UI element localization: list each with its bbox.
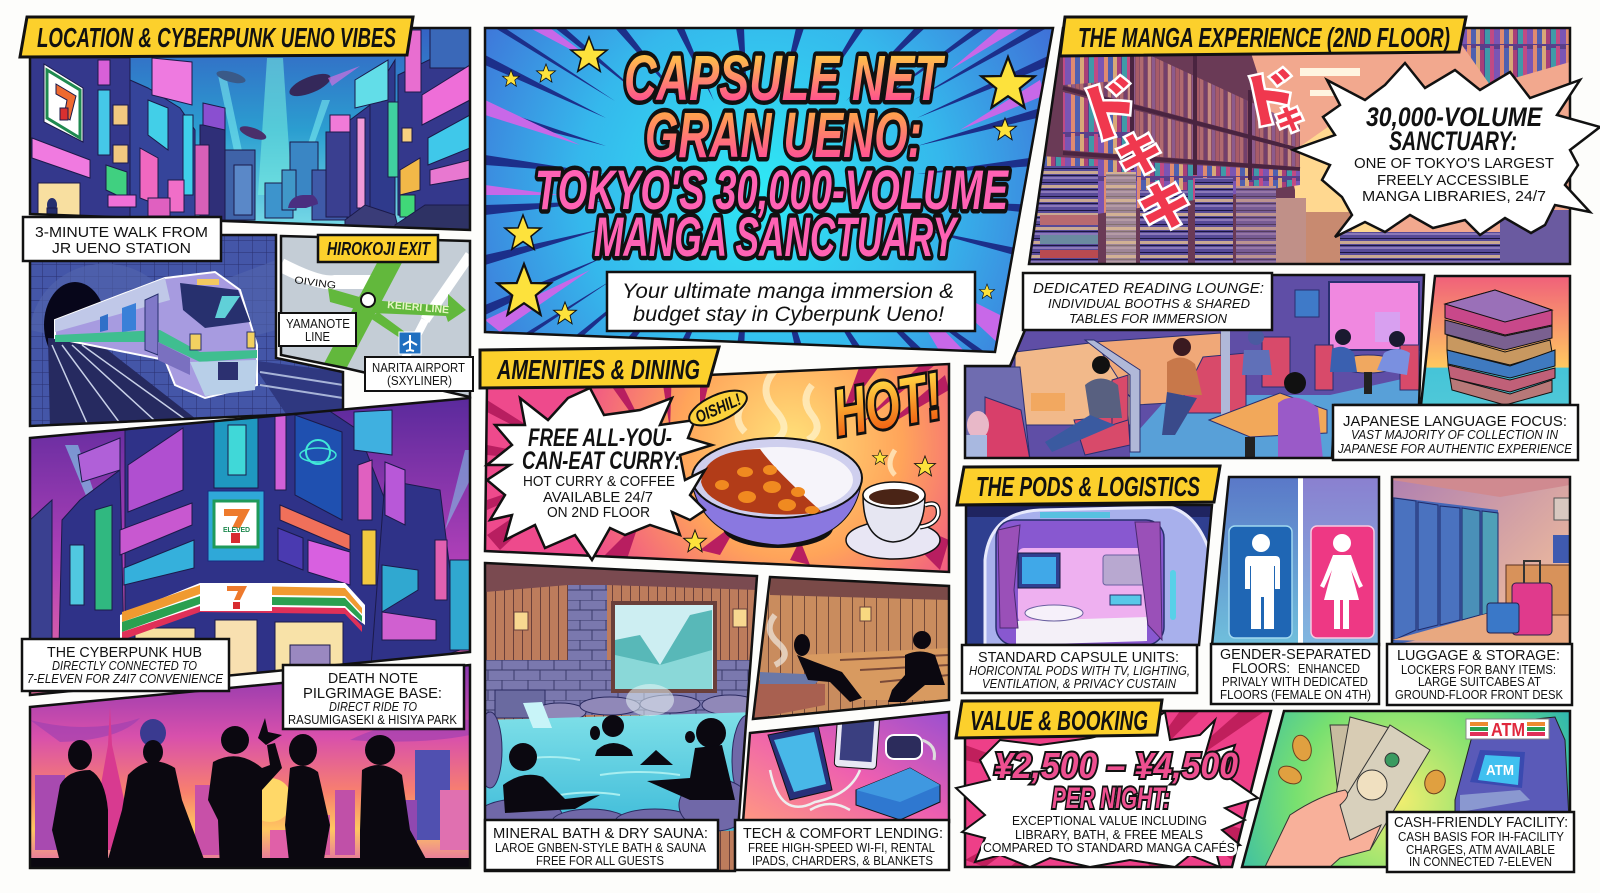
section: amenities and dining (478, 347, 950, 873)
panel: neon street (30, 28, 470, 235)
sign: Hirokoji exit: HIROKOJI EXIT (327, 239, 432, 259)
coffee cup (846, 482, 940, 559)
heading: location: LOCATION & CYBERPUNK UENO VIBES (37, 22, 396, 53)
title text (535, 42, 1009, 268)
burst: price callout: EXCEPTIONAL VALUE INCLUDING (1012, 814, 1207, 828)
silhouette group (30, 718, 470, 870)
sound effects: doki doki: ド (1235, 62, 1305, 138)
panel: price (965, 711, 1275, 871)
book stacks (1030, 166, 1098, 266)
icon: book stack (1445, 290, 1555, 405)
burst: price callout (956, 712, 1258, 867)
icon: iPad (834, 720, 880, 770)
caption: Death Note pilgrimage: PILGRIMAGE BASE: (303, 685, 442, 702)
caption: cyberpunk hub (22, 639, 229, 691)
caption: cash-friendly facility: CASH BASIS FOR IH-FACILITY (1398, 830, 1565, 844)
panel: tech lending (743, 711, 950, 824)
panel: capsule pod (966, 505, 1212, 647)
subtitle callout: budget stay in Cyberpunk Ueno! (633, 303, 944, 326)
burst: free curry callout: AVAILABLE 24/7 (543, 489, 653, 506)
caption: Japanese language focus: JAPANESE LANGUAGE FOCUS: (1343, 413, 1567, 430)
icon: blanket (856, 768, 940, 820)
panel: cash and ATM (1240, 711, 1572, 869)
caption: Yamanote line: YAMANOTE (286, 317, 350, 331)
section: location and cyberpunk Ueno vibes (20, 17, 473, 870)
stars (497, 37, 1035, 324)
burst: price callout: ¥2,500 – ¥4,500 (994, 745, 1238, 786)
caption: luggage and storage: LUGGAGE & STORAGE: (1397, 647, 1560, 664)
burst: free curry callout: FREE ALL-YOU- (528, 424, 672, 452)
steam (738, 370, 817, 440)
burst: price callout: COMPARED TO STANDARD MANGA CAFÉS (983, 840, 1235, 855)
burst: 30,000-volume sanctuary: FREELY ACCESSIBLE (1377, 172, 1529, 189)
icon: coins (1276, 733, 1449, 797)
bathers (503, 715, 735, 813)
caption: Death Note pilgrimage (283, 665, 464, 729)
icon: female sign (1311, 526, 1374, 638)
title text: CAPSULE NET (624, 42, 945, 114)
sound effects: doki doki: キ (1273, 102, 1307, 138)
burst: free curry callout: CAN-EAT CURRY: (522, 447, 680, 475)
caption: standard capsule units (962, 645, 1197, 693)
caption: cyberpunk hub: DIRECTLY CONNECTED TO (52, 658, 197, 673)
road label: OIVING (294, 275, 337, 292)
burst: free curry callout: HOT CURRY & COFFEE (523, 473, 675, 490)
caption: cash-friendly facility: CASH-FRIENDLY FACILITY: (1394, 814, 1568, 831)
caption: Japanese language focus: JAPANESE FOR AUTHENTIC EXPERIENCE (1337, 441, 1572, 456)
title text: MANGA SANCTUARY (594, 205, 959, 268)
caption: gender-separated floors (1211, 644, 1379, 704)
caption: gender-separated floors: PRIVALY WITH DEDICATED (1222, 675, 1368, 689)
caption: tech lending: IPADS, CHARDERS, & BLANKETS (752, 854, 933, 868)
panel: 7-Eleven cyberpunk hub (30, 398, 470, 698)
caption: gender-separated floors: GENDER-SEPARATED (1220, 646, 1371, 663)
caption: luggage and storage (1387, 644, 1572, 705)
icon: 7-Eleven sign (208, 491, 264, 561)
panel: manga library (1025, 15, 1572, 268)
caption: tech lending (735, 820, 949, 870)
curry bowl (691, 438, 862, 548)
caption: tech lending: TECH & COMFORT LENDING: (743, 825, 943, 842)
caption: luggage and storage: LOCKERS FOR BANY ITEMS: (1401, 663, 1556, 677)
burst: 30,000-volume sanctuary: SANCTUARY: (1389, 126, 1517, 156)
icon: tablet (768, 725, 832, 800)
sound effects: doki doki: ド (1070, 69, 1150, 154)
icon: hand (1265, 790, 1381, 867)
burst: 30,000-volume sanctuary: 30,000-VOLUME (1366, 102, 1543, 132)
caption: cyberpunk hub: THE CYBERPUNK HUB (47, 644, 202, 661)
storefront stripes (120, 583, 365, 640)
booths (1015, 343, 1135, 425)
sound effects: doki doki: キ (1110, 123, 1170, 187)
caption: Narita airport (365, 357, 473, 391)
caption: gender-separated floors: ENHANCED (1298, 662, 1360, 676)
caption: gender-separated floors: FLOORS: (1232, 660, 1290, 677)
caption: luggage and storage: GROUND-FLOOR FRONT DESK (1395, 688, 1564, 702)
caption: mineral bath (485, 820, 718, 870)
subtitle callout (607, 272, 975, 331)
caption: cash-friendly facility: IN CONNECTED 7-ELEVEN (1409, 855, 1552, 869)
sound effects: doki doki (1083, 65, 1306, 232)
icon: banknotes (1325, 717, 1430, 850)
caption: Death Note pilgrimage: DIRECT RIDE TO (329, 699, 417, 714)
caption: dedicated reading lounge: TABLES FOR IMMERSION (1069, 311, 1228, 326)
panel: gender-separated floors (1212, 477, 1380, 647)
caption: Japanese language focus: VAST MAJORITY OF COLLECTION IN (1351, 427, 1559, 442)
caption: gender-separated floors: FLOORS (FEMALE ON 4TH) (1220, 688, 1371, 702)
caption: tech lending: FREE HIGH-SPEED WI-FI, RENTAL (748, 841, 935, 855)
caption: Japanese language focus (1333, 405, 1578, 460)
heading: amenities: AMENITIES & DINING (496, 354, 700, 385)
caption: dedicated reading lounge: INDIVIDUAL BOOTHS & SHARED (1048, 296, 1250, 311)
neon window (1329, 282, 1419, 350)
icon: charger (770, 770, 860, 810)
panel: free curry (485, 358, 950, 574)
speed lines (485, 28, 1050, 352)
panel: title (485, 28, 1055, 353)
caption: standard capsule units: VENTILATION, & PRIVACY CUSTAIN (982, 677, 1177, 691)
caption: standard capsule units: STANDARD CAPSULE UNITS: (978, 649, 1179, 666)
heading: manga experience (1060, 17, 1466, 56)
section: value and booking (956, 700, 1574, 872)
heading: value and booking: VALUE & BOOKING (970, 705, 1148, 736)
caption: 3-minute walk (23, 217, 221, 261)
sound effect: Oishii: OISHIL! (692, 390, 744, 427)
heading: pods and logistics (957, 466, 1220, 505)
caption: mineral bath: LAROE GNBEN-STYLE BATH & SAUNA (495, 841, 707, 855)
ceiling glow (1252, 45, 1569, 232)
panel: dry sauna (750, 577, 950, 722)
heading: amenities (480, 347, 719, 388)
rocks (486, 712, 746, 832)
icon: mobile battery (886, 735, 934, 760)
caption: luggage and storage: LARGE SUITCABES AT (1418, 675, 1541, 689)
line label: KEIERI LINE (387, 299, 450, 316)
icon: ATM: ATM (1486, 762, 1514, 779)
panel: train in tunnel (30, 235, 343, 430)
sign: Hirokoji exit (318, 235, 438, 262)
panel: mineral bath (478, 563, 764, 873)
icon: 7-Eleven sign: ELEVED (223, 527, 250, 534)
section: pods and logistics (957, 466, 1572, 705)
icon: ATM: ATM (1491, 720, 1525, 740)
caption: cyberpunk hub: 7-ELEVEN FOR Z4I7 CONVENIENCE (27, 671, 223, 686)
burst: free curry callout: ON 2ND FLOOR (547, 504, 650, 521)
burst: free curry callout (487, 388, 712, 560)
panel: Death Note silhouettes (30, 665, 470, 870)
caption: cash-friendly facility: CHARGES, ATM AVAILABLE (1406, 843, 1555, 857)
caption: Yamanote line (279, 313, 356, 346)
burst: price callout: PER NIGHT: (1052, 782, 1170, 815)
icon: airplane (399, 332, 421, 354)
shelves (1064, 56, 1300, 147)
panel: manga stack (1420, 276, 1572, 406)
icon: ATM (1455, 717, 1570, 840)
caption: cash-friendly facility (1387, 812, 1574, 872)
caption: Narita airport: NARITA AIRPORT (372, 361, 465, 375)
readers (1045, 329, 1410, 460)
caption: standard capsule units: HORICONTAL PODS WITH TV, LIGHTING, (969, 664, 1190, 678)
caption: dedicated reading lounge: DEDICATED READING LOUNGE: (1033, 280, 1264, 297)
caption: 3-minute walk: 3-MINUTE WALK FROM (35, 224, 208, 241)
burst: 30,000-volume sanctuary (1293, 63, 1600, 237)
caption: Death Note pilgrimage: RASUMIGASEKI & HISIYA PARK (288, 713, 458, 727)
caption: dedicated reading lounge (1023, 273, 1272, 330)
section: manga experience (965, 15, 1600, 460)
caption: Yamanote line: LINE (305, 330, 330, 344)
subtitle callout: Your ultimate manga immersion & (622, 280, 954, 303)
caption: 3-minute walk: JR UENO STATION (52, 240, 191, 257)
burst: 30,000-volume sanctuary: MANGA LIBRARIES, 24/7 (1362, 188, 1546, 205)
caption: mineral bath: FREE FOR ALL GUESTS (536, 854, 664, 868)
heading: value and booking (956, 700, 1162, 738)
caption: Death Note pilgrimage: DEATH NOTE (328, 670, 418, 687)
panel: lockers and luggage (1392, 477, 1570, 647)
sound effects: doki doki: キ (1132, 172, 1199, 244)
burst: price callout: LIBRARY, BATH, & FREE MEALS (1015, 828, 1203, 842)
heading: location (20, 17, 413, 57)
title text: GRAN UENO: (645, 99, 922, 171)
burst: 30,000-volume sanctuary: ONE OF TOKYO'S LARGEST (1354, 155, 1554, 172)
panel: route map (281, 236, 471, 401)
caption: mineral bath: MINERAL BATH & DRY SAUNA: (493, 825, 708, 842)
heading: pods and logistics: THE PODS & LOGISTICS (976, 471, 1200, 502)
caption: Narita airport: (SXYLINER) (387, 374, 452, 388)
sound effect: HOT: HOT! (828, 358, 947, 450)
icon: male sign (1229, 526, 1292, 638)
title text: TOKYO'S 30,000-VOLUME (535, 158, 1009, 221)
panel: reading lounge (965, 275, 1425, 460)
